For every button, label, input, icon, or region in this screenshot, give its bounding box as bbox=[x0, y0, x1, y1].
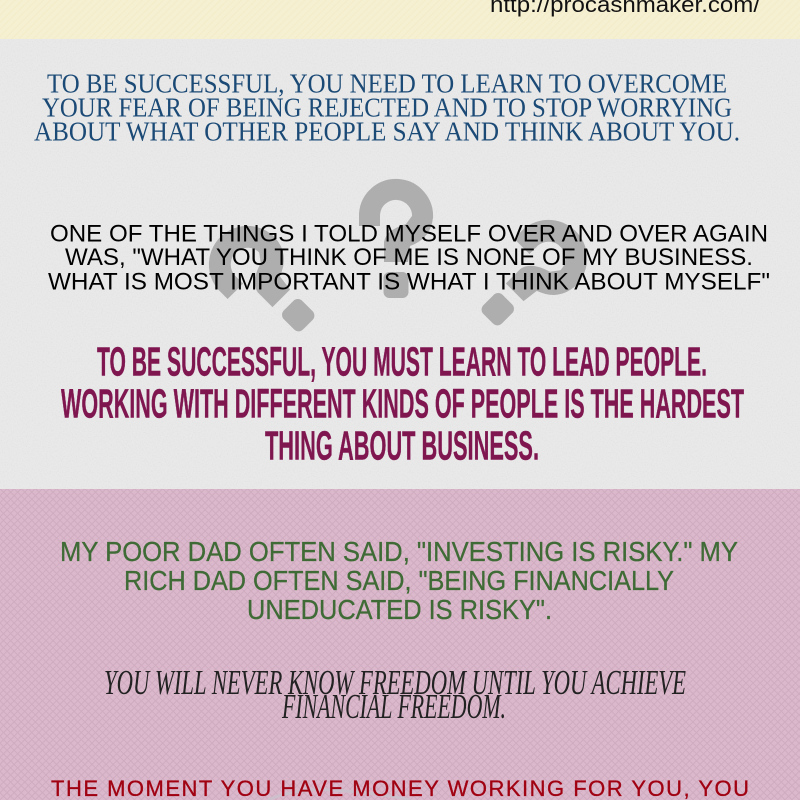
blue quote about fear of rejection: YOUR FEAR OF BEING REJECTED AND TO STOP WORRYING bbox=[42, 92, 732, 122]
green quote about investing risk bbox=[60, 536, 738, 625]
blue quote about fear of rejection bbox=[34, 68, 740, 146]
panel: grey quotes section bbox=[0, 39, 800, 489]
green quote about investing risk: UNEDUCATED IS RISKY". bbox=[247, 594, 552, 625]
pale arc peeking in at the bottom edge bbox=[268, 790, 410, 800]
maroon quote about leading people bbox=[61, 338, 744, 468]
blue quote about fear of rejection: ABOUT WHAT OTHER PEOPLE SAY AND THINK ABOUT YOU. bbox=[34, 116, 740, 146]
black quote about self-opinion bbox=[48, 220, 770, 296]
black quote about self-opinion: WHAT IS MOST IMPORTANT IS WHAT I THINK ABOUT MYSELF" bbox=[48, 268, 770, 296]
panel: yellow header band bbox=[0, 0, 800, 39]
blue quote about fear of rejection: TO BE SUCCESSFUL, YOU NEED TO LEARN TO OVERCOME bbox=[47, 68, 727, 98]
maroon quote about leading people: THING ABOUT BUSINESS. bbox=[265, 422, 539, 468]
black script quote about financial freedom: FINANCIAL FREEDOM. bbox=[281, 687, 506, 726]
black quote about self-opinion: ONE OF THE THINGS I TOLD MYSELF OVER AND OVER AGAIN bbox=[50, 220, 768, 248]
icon: three grey question marks bbox=[208, 189, 595, 346]
green quote about investing risk: RICH DAD OFTEN SAID, "BEING FINANCIALLY bbox=[124, 565, 674, 596]
black quote about self-opinion: WAS, "WHAT YOU THINK OF ME IS NONE OF MY BUSINESS. bbox=[65, 244, 753, 271]
panel: pink quotes section bbox=[0, 489, 800, 800]
black script quote about financial freedom bbox=[104, 663, 686, 726]
green quote about investing risk: MY POOR DAD OFTEN SAID, "INVESTING IS RISKY." MY bbox=[60, 536, 738, 567]
